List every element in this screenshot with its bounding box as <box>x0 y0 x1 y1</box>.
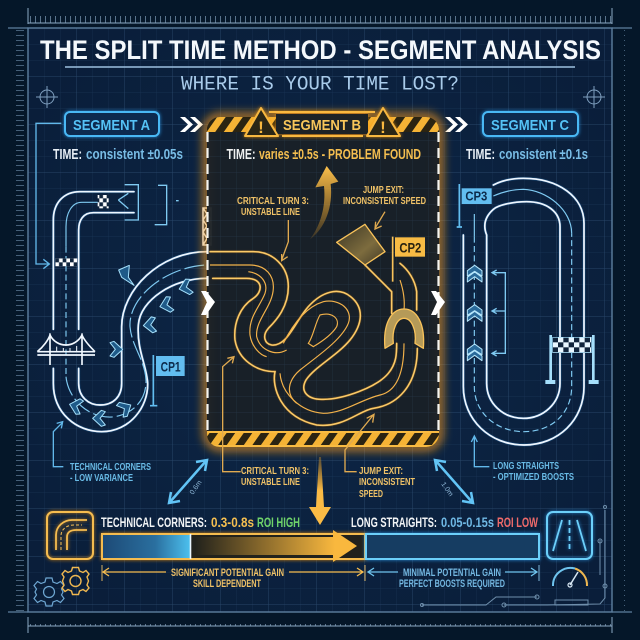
arrow: A to B <box>180 117 203 132</box>
jump ramp <box>337 224 385 265</box>
label: technical corners: TECHNICAL CORNERS <box>70 462 151 473</box>
dimension: significant gain: SIGNIFICANT POTENTIAL GAIN <box>171 567 284 579</box>
icon: bridge <box>37 333 95 365</box>
dimension: minimal gain <box>368 565 539 590</box>
label: jump exit upper: INCONSISTENT SPEED <box>343 195 426 207</box>
arrow: curved up <box>310 166 338 239</box>
bar right segment <box>366 534 539 559</box>
hazard strip: top <box>207 117 439 132</box>
label: jump exit lower: INCONSISTENT <box>359 476 415 488</box>
centre lines <box>474 189 572 432</box>
stat: long straights: LONG STRAIGHTS: <box>351 514 437 530</box>
label: jump exit upper <box>343 184 426 207</box>
panel fill <box>207 117 439 447</box>
gate bracket <box>118 185 179 225</box>
label: critical turn upper: CRITICAL TURN 3: <box>237 195 309 207</box>
heading: segment B <box>245 108 400 137</box>
label: critical turn lower: UNSTABLE LINE <box>241 476 300 488</box>
label: jump exit lower <box>359 465 415 500</box>
label: critical turn lower <box>241 465 309 488</box>
icon: straight road <box>547 512 592 559</box>
chevrons on track <box>67 265 194 426</box>
ruler: left <box>15 28 24 612</box>
heading: segment A <box>65 112 159 136</box>
bar: potential gain <box>102 530 539 562</box>
icon: gauge <box>553 568 587 587</box>
track lines <box>463 178 584 445</box>
label: long straights: LONG STRAIGHTS <box>493 461 559 472</box>
icon: gear yellow <box>62 568 89 594</box>
track: segment B <box>210 166 425 472</box>
dimension: significant gain: SKILL DEPENDENT <box>193 578 261 590</box>
time: segment A <box>53 146 183 163</box>
arrow: panel to right <box>431 291 445 315</box>
ruler: bottom <box>28 617 612 633</box>
truss <box>203 208 211 245</box>
heading: segment B: SEGMENT B <box>283 117 361 134</box>
dashed panel sides <box>208 132 438 432</box>
subtitle: WHERE IS YOUR TIME LOST? <box>181 74 459 96</box>
inner track lines <box>210 265 404 413</box>
time: segment B <box>226 146 421 163</box>
time: segment A: TIME: <box>53 146 82 163</box>
flag: CP3: CP3 <box>465 190 487 204</box>
flag: CP2 <box>393 237 425 282</box>
label: critical turn upper <box>237 195 309 218</box>
arrow: left to panel <box>201 291 215 315</box>
dimension arrow: right: 1.0m <box>439 481 454 498</box>
icon: crosshair left <box>36 86 58 108</box>
connector: long straights <box>471 436 489 467</box>
icon: tunnel arch <box>385 309 424 348</box>
label: long straights <box>493 461 574 483</box>
icon: corner road <box>47 512 93 559</box>
label: long straights: - OPTIMIZED BOOSTS <box>493 472 574 483</box>
bracket arrows <box>492 270 505 356</box>
flag: CP1: CP1 <box>161 358 181 374</box>
icon: warning left <box>245 108 278 137</box>
time: segment B: TIME: <box>226 146 256 163</box>
ruler: top <box>28 8 612 24</box>
icon: warning right <box>367 108 400 137</box>
stat: long straights: 0.05-0.15s <box>441 514 494 530</box>
heading: segment A: SEGMENT A <box>73 117 150 134</box>
bar big arrow <box>192 530 357 562</box>
boost chevrons <box>467 265 482 361</box>
dimension arrow: right <box>435 460 473 503</box>
flag: CP1 <box>150 355 185 406</box>
stat: long straights: ROI LOW <box>497 514 539 530</box>
flag: CP3 <box>457 184 492 227</box>
dimension: minimal gain: PERFECT BOOSTS REQUIRED <box>399 578 505 590</box>
dimension arrow: left <box>169 460 207 503</box>
panel: segment A track <box>36 123 207 467</box>
arrow: B to C <box>445 117 468 132</box>
ruler: right <box>616 28 625 612</box>
stat: technical corners: 0.3-0.8s <box>211 514 254 530</box>
label: jump exit lower: SPEED <box>359 488 383 500</box>
flag: CP2: CP2 <box>399 240 421 256</box>
label: critical turn upper: UNSTABLE LINE <box>241 206 300 218</box>
dimension: minimal gain: MINIMAL POTENTIAL GAIN <box>403 567 501 579</box>
connector: segment A to start <box>36 123 61 269</box>
time: segment C <box>466 146 588 163</box>
time: segment C: TIME: <box>466 146 495 163</box>
hazard strip: bottom <box>207 432 439 447</box>
dimension: significant gain <box>102 565 365 590</box>
label: technical corners: - LOW VARIANCE <box>70 473 133 484</box>
track lines <box>53 192 207 432</box>
arrow: down from panel <box>309 457 331 525</box>
circuit decoration <box>420 506 607 607</box>
icon: gear blue <box>34 578 64 606</box>
connectors <box>223 212 385 472</box>
icon: crosshair right <box>583 86 605 108</box>
heading: segment C <box>483 112 578 136</box>
label: jump exit lower: JUMP EXIT: <box>359 465 403 477</box>
connector: technical corners <box>53 422 63 467</box>
label: critical turn lower: CRITICAL TURN 3: <box>241 465 309 477</box>
icon: finish gate <box>545 335 599 382</box>
bar left segment <box>102 534 365 559</box>
panel: segment C track <box>457 178 599 467</box>
checkered start line <box>55 258 77 266</box>
icon: warning left: ! <box>258 118 264 137</box>
centre lines <box>66 202 207 417</box>
bar left fill <box>103 535 190 558</box>
track lines <box>210 252 417 425</box>
label: jump exit upper: JUMP EXIT: <box>363 184 404 196</box>
title underline <box>65 66 575 68</box>
panel: segment B <box>207 117 439 447</box>
label: technical corners <box>70 462 151 484</box>
stat: long straights <box>351 514 539 530</box>
time: segment A: consistent ±0.05s <box>86 146 183 163</box>
stat: technical corners: ROI HIGH <box>257 514 300 530</box>
time: segment B: varies ±0.5s - PROBLEM FOUND <box>259 146 421 163</box>
checkered mark <box>98 195 109 208</box>
heading: segment C: SEGMENT C <box>491 117 569 134</box>
time: segment C: consistent ±0.1s <box>499 146 588 163</box>
panel glow <box>207 117 439 447</box>
icon: warning right: ! <box>380 118 386 137</box>
dimension arrow: left: 0.6m <box>189 479 204 496</box>
stat: technical corners: TECHNICAL CORNERS: <box>101 514 207 530</box>
